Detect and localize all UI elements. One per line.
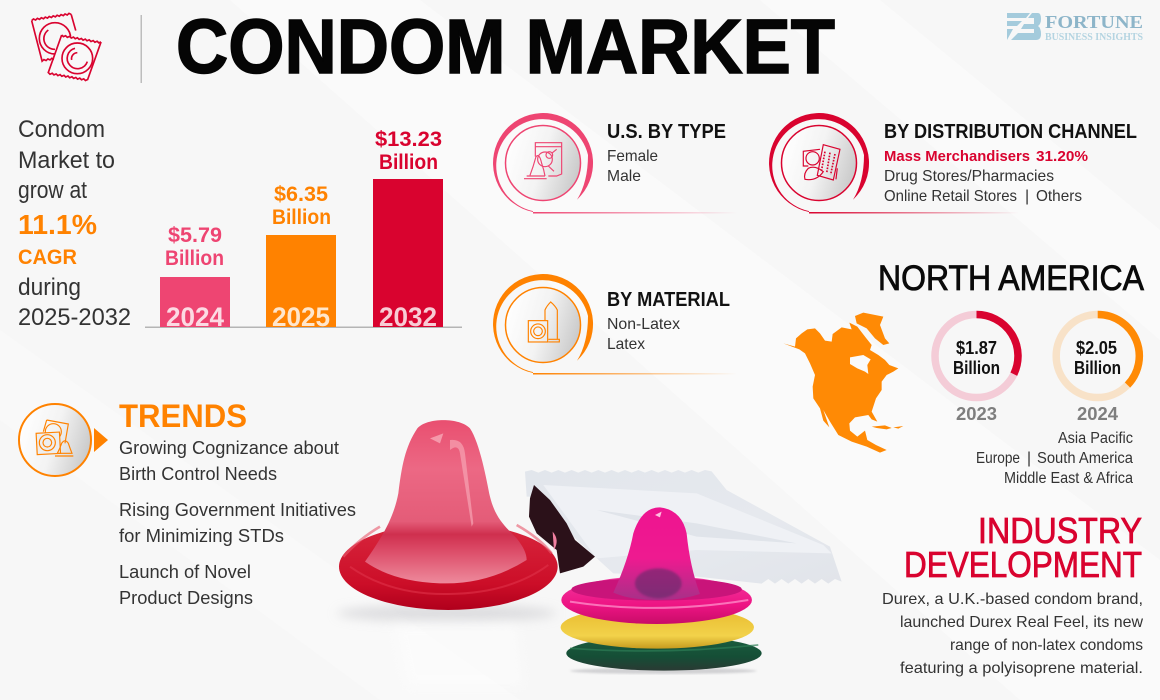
text block: CAGR statement: CAGR	[18, 246, 77, 269]
text block: other regions: Middle East & Africa	[1004, 470, 1133, 487]
heading: BY MATERIAL	[607, 289, 730, 311]
list of trends: Product Designs	[119, 588, 253, 608]
icon: trends	[19, 404, 108, 476]
list of trends: Rising Government Initiatives	[119, 500, 356, 520]
list of trends: Birth Control Needs	[119, 464, 277, 484]
list: Latex	[607, 336, 645, 353]
bar 2024: Billion	[165, 247, 224, 270]
foil packet	[525, 470, 842, 584]
list: Female	[607, 148, 658, 165]
text block: other regions: Asia Pacific	[1058, 430, 1133, 447]
dark wrapper interior	[529, 485, 595, 573]
bar 2025: 2025	[272, 302, 330, 332]
text block: CAGR statement: grow at	[18, 177, 87, 204]
list: Mass Merchandisers	[884, 148, 1030, 165]
text block: CAGR statement	[18, 116, 131, 331]
text block: CAGR statement: Condom	[18, 116, 105, 143]
donut chart: 2023: 2023	[956, 404, 997, 424]
list	[884, 148, 1088, 205]
text block: CAGR statement: 11.1%	[18, 209, 97, 240]
title: CONDOM MARKET	[176, 4, 835, 90]
list of trends	[119, 438, 356, 608]
text block: other regions	[976, 430, 1133, 487]
bar 2032: $13.23	[375, 128, 442, 151]
panel: by distribution channel	[769, 113, 1137, 214]
list: Online Retail Stores	[884, 188, 1017, 205]
heading: U.S. BY TYPE	[607, 121, 726, 143]
text block: other regions: |	[1027, 450, 1031, 467]
bar 2024: 2024	[166, 302, 224, 332]
text block: other regions: Europe	[976, 450, 1020, 467]
bar 2024: $5.79	[168, 224, 222, 247]
bar chart: market size	[145, 128, 462, 332]
list of trends: Growing Cognizance about	[119, 438, 339, 458]
list: Male	[607, 168, 641, 185]
logo: Fortune Business Insights	[1007, 12, 1143, 43]
header divider	[140, 15, 142, 83]
list: Non-Latex	[607, 316, 680, 333]
list of trends: for Minimizing STDs	[119, 526, 284, 546]
list: Drug Stores/Pharmacies	[884, 168, 1054, 185]
heading: trends: TRENDS	[119, 398, 247, 434]
photo: condoms and foil packet	[337, 420, 842, 687]
bar 2025	[266, 183, 336, 332]
list: 31.20%	[1036, 148, 1088, 165]
text block: industry development: Durex, a U.K.-based condom brand,	[882, 591, 1143, 608]
text block: CAGR statement: Market to	[18, 147, 115, 174]
bar 2032: 2032	[379, 302, 437, 332]
text block: industry development: range of non-latex condoms	[950, 637, 1143, 654]
list: Others	[1036, 188, 1082, 205]
text block: industry development: featuring a polyisoprene material.	[900, 660, 1143, 677]
bar 2024	[160, 224, 230, 332]
list of trends: Launch of Novel	[119, 562, 251, 582]
logo: Fortune Business Insights: FORTUNE	[1045, 12, 1143, 32]
donut chart: 2024: $2.05	[1076, 338, 1117, 358]
icon: packet and condom	[493, 274, 737, 374]
icon: female male packet	[493, 113, 737, 214]
donut chart: 2024	[1056, 314, 1139, 424]
text block: industry development: launched Durex Real Feel, its new	[900, 614, 1143, 631]
map: North America	[783, 313, 903, 453]
header icon: condom packets	[31, 13, 101, 82]
list	[607, 316, 680, 353]
panel: U.S. by type	[493, 113, 737, 214]
list: |	[1025, 188, 1029, 205]
heading: Industry Development: INDUSTRY	[978, 510, 1142, 551]
text block: other regions: South America	[1037, 450, 1133, 467]
heading: Industry Development	[904, 510, 1142, 585]
donut chart: 2024: Billion	[1074, 358, 1121, 378]
bar 2025: $6.35	[274, 183, 328, 206]
logo: Fortune Business Insights: BUSINESS INSIGHTS	[1045, 32, 1143, 43]
donut chart: 2023: Billion	[953, 358, 1000, 378]
stacked colored condoms	[561, 507, 762, 671]
shadows and reflection	[337, 605, 557, 687]
text block: industry development	[882, 591, 1143, 677]
panel: by material	[493, 274, 737, 374]
text block: trends	[119, 398, 356, 608]
bar 2032	[373, 128, 443, 332]
text block: CAGR statement: during	[18, 274, 81, 301]
stacked rings shadow	[570, 668, 757, 674]
list	[607, 148, 658, 185]
donut chart: 2023: $1.87	[956, 338, 997, 358]
donut chart: 2024: 2024	[1077, 404, 1118, 424]
icon: pills and packet	[769, 113, 1019, 214]
bar 2032: Billion	[379, 151, 438, 174]
red condom	[339, 420, 558, 610]
bar 2025: Billion	[272, 206, 331, 229]
donut chart: 2023	[935, 314, 1018, 424]
heading: BY DISTRIBUTION CHANNEL	[884, 121, 1137, 143]
text block: CAGR statement: 2025-2032	[18, 304, 131, 331]
